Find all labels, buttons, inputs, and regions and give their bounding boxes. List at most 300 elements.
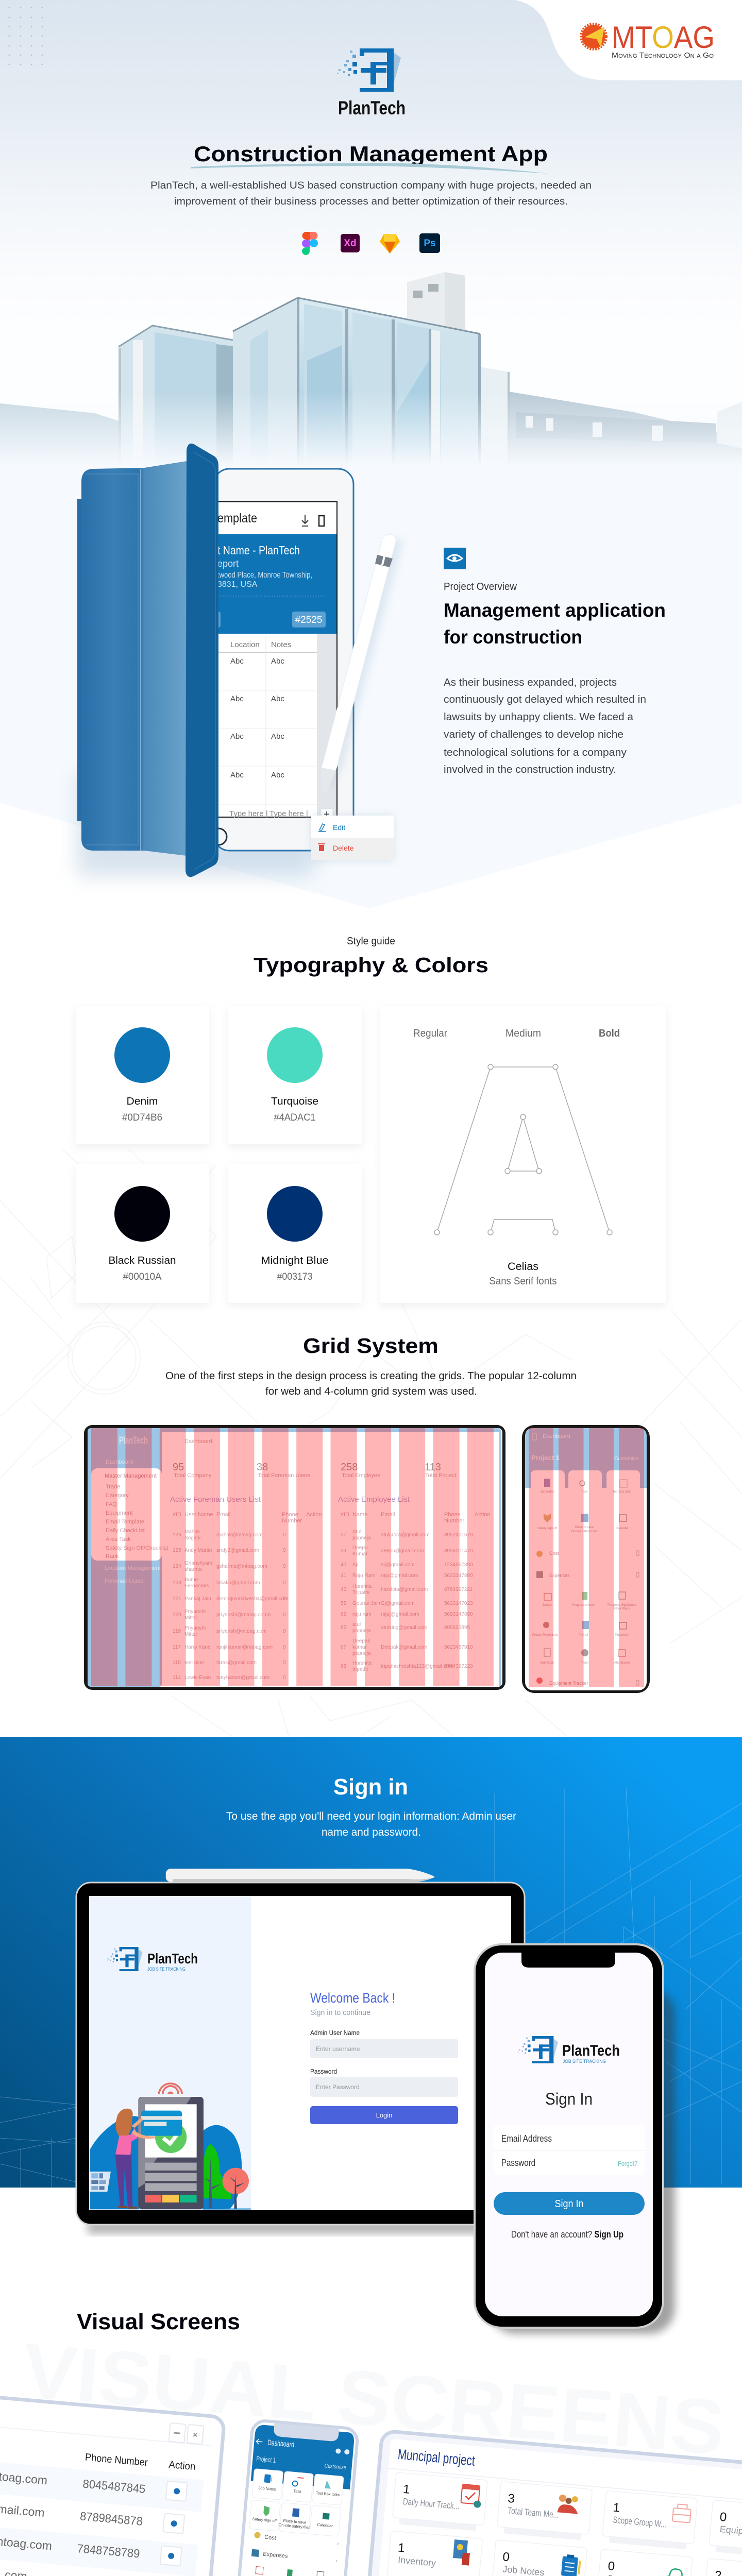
phone mockup xyxy=(475,1944,675,2334)
faint ui text: Number xyxy=(444,1518,464,1524)
faint ui text: Harry Kane xyxy=(184,1645,211,1650)
faint ui text: tarak@gmail.com xyxy=(216,1660,257,1666)
ipad screen: + xyxy=(324,809,330,820)
faint ui text: Action xyxy=(306,1512,322,1518)
faint ui text: 119 xyxy=(173,1629,181,1634)
intro paragraph: PlanTech, a well-established US based construction company with huge projects, needed an xyxy=(150,180,592,191)
faint ui text: atul xyxy=(352,1622,361,1628)
credentials card: Email Address xyxy=(501,2133,552,2144)
swatch: denim: Denim xyxy=(127,1096,158,1107)
cost and expenses rows: Cost xyxy=(264,2534,276,2541)
faint ui text: Category xyxy=(106,1493,129,1499)
faint ui text: #ID xyxy=(341,1512,349,1518)
overview heading: Management application xyxy=(444,600,666,621)
faint ui text xyxy=(531,1433,639,1686)
stat values: 0 xyxy=(719,2510,727,2524)
faint ui text: On-site safety Files xyxy=(571,1530,598,1533)
ipad screen: 3831, USA xyxy=(217,580,258,589)
swatch: turquoise: Turquoise xyxy=(271,1096,318,1107)
faint ui text: 114 xyxy=(173,1675,181,1681)
font weights: Regular xyxy=(413,1028,447,1039)
phone header text: Dashboard xyxy=(267,2438,295,2449)
typography card xyxy=(380,1006,666,1303)
overview paragraph: continuously got delayed which resulted in xyxy=(444,694,646,705)
PlanTech logo xyxy=(337,48,406,118)
table rows xyxy=(0,2469,146,2576)
faint ui text: Sogani xyxy=(184,1535,200,1541)
faint ui text: Total Project xyxy=(425,1472,457,1479)
ipad screen: Type here | xyxy=(269,809,308,818)
font name: Sans Serif fonts xyxy=(490,1276,556,1287)
ipad cover xyxy=(77,444,218,877)
table headers xyxy=(85,2452,196,2472)
faint ui text: Number xyxy=(282,1518,302,1524)
faint ui text: demoquvakrives94@gmail.com xyxy=(216,1596,289,1602)
faint ui text: Daily CheckList xyxy=(106,1528,145,1534)
faint ui text: papneja xyxy=(352,1628,371,1634)
faint ui text: 5693147890 xyxy=(444,1612,473,1617)
faint ui text: Phone xyxy=(282,1512,298,1518)
MTOAG logo: MTOAG xyxy=(612,20,715,55)
faint ui text: Location Management xyxy=(105,1565,161,1571)
desktop grid mockup xyxy=(84,1425,505,1690)
faint ui text: 95 xyxy=(173,1462,184,1473)
faint ui text: Project Projections xyxy=(532,1634,558,1637)
faint ui text: 65 xyxy=(341,1625,347,1631)
faint ui text: Mittal xyxy=(184,1632,197,1637)
faint ui text: 41 xyxy=(341,1573,347,1579)
ipad screen: Abc xyxy=(271,771,284,779)
style guide heading xyxy=(254,936,488,977)
faint ui text: Bumo xyxy=(184,1577,198,1583)
icon: sketch xyxy=(380,234,400,253)
blueprint background xyxy=(0,1149,742,1736)
faint ui text: andy2@gmail.com xyxy=(216,1548,259,1553)
swatch: black russian: #00010A xyxy=(123,1272,162,1282)
notch xyxy=(521,1952,615,1968)
faint ui text: Email xyxy=(381,1512,395,1518)
faint ui text: FAQ xyxy=(106,1501,117,1507)
project overview xyxy=(444,548,666,775)
panel: foreman phone table: × xyxy=(192,2431,198,2440)
faint ui text: 62 xyxy=(341,1612,347,1617)
ipad body xyxy=(214,469,353,851)
laptop screen xyxy=(89,1896,511,2210)
panel: foreman phone table xyxy=(0,2381,225,2576)
faint ui text: tonyhamer@gmail.com xyxy=(216,1675,269,1681)
table headers: Action xyxy=(168,2459,196,2472)
phone screen xyxy=(485,1953,653,2316)
icon: photoshop: Ps xyxy=(424,238,436,249)
swatch: turquoise xyxy=(228,1006,362,1144)
faint ui text: Atul xyxy=(352,1529,361,1535)
font weights xyxy=(413,1028,620,1039)
login form: Password xyxy=(310,2067,337,2075)
faint ui text: Master Management xyxy=(105,1473,157,1479)
faint ui text: Harshita xyxy=(352,1584,372,1589)
ipad shadow xyxy=(77,773,314,876)
overview paragraph xyxy=(444,677,646,775)
intro paragraph: improvement of their business processes and better optimization of their resources. xyxy=(174,196,568,207)
sign in title: Sign In xyxy=(545,2090,593,2108)
feature labels: Job Notes xyxy=(258,2485,276,2492)
window buttons xyxy=(169,2423,204,2444)
credentials card xyxy=(494,2125,645,2175)
plantech logo xyxy=(107,1947,198,1972)
icon: adobe xd xyxy=(341,234,360,252)
letter A outline xyxy=(434,1064,612,1235)
building photo xyxy=(0,272,742,472)
edit delete menu xyxy=(311,816,394,860)
faint ui text: ranjitkumar@mtoag.com xyxy=(216,1645,273,1650)
icon: eye xyxy=(444,548,466,569)
faint ui text: Active Employee List xyxy=(338,1495,410,1504)
faint ui text: Deepu xyxy=(352,1545,367,1551)
faint ui text: User Name xyxy=(184,1512,213,1518)
phone frame xyxy=(475,1944,663,2328)
faint ui text: Daily's xyxy=(543,1604,552,1607)
faint ui text: Trade xyxy=(106,1484,120,1490)
icon: daily hours calendar xyxy=(461,2484,482,2508)
phone shadow xyxy=(490,1989,675,2334)
icon: figma xyxy=(302,232,318,255)
sign in section xyxy=(0,1737,742,2188)
faint ui text: Progress sheets xyxy=(572,1604,595,1607)
ipad screen: #2525 xyxy=(295,615,322,625)
faint ui text: 40 xyxy=(341,1562,347,1568)
faint ui text: 0 xyxy=(283,1548,286,1553)
faint ui text: 5623147023 xyxy=(444,1601,473,1606)
wireframe building xyxy=(0,1788,742,2188)
faint ui text: Mittal xyxy=(184,1615,197,1621)
MTOAG logo xyxy=(581,20,715,60)
faint ui text: papneja xyxy=(352,1651,371,1656)
swatch: midnight blue: Midnight Blue xyxy=(261,1255,329,1266)
stat values: 0 xyxy=(608,2559,615,2573)
faint ui text: 5623487910 xyxy=(444,1645,473,1650)
visual screens heading: Visual Screens xyxy=(77,2309,240,2334)
sidebar base xyxy=(88,1428,501,1687)
stylus pen xyxy=(166,1869,434,1883)
faint ui text: 258 xyxy=(341,1462,358,1473)
table rows: 8789845878 xyxy=(79,2509,143,2528)
phone header text xyxy=(255,2437,348,2471)
phone logo xyxy=(518,2036,620,2064)
ipad screen: eport xyxy=(217,558,239,569)
sign in paragraph xyxy=(226,1810,516,1838)
faint ui text: Task xyxy=(581,1490,588,1494)
swatch: black russian xyxy=(76,1164,209,1303)
faint ui text: tripathi xyxy=(352,1667,368,1672)
panel: municipal project xyxy=(362,2431,742,2576)
title xyxy=(191,142,549,174)
faint ui text: Total Foreman Users xyxy=(258,1472,311,1479)
feature labels: Place to save xyxy=(283,2518,307,2525)
faint ui text: 8764397221 xyxy=(444,1587,473,1592)
faint ui text: Ghanshyam xyxy=(184,1561,212,1566)
faint ui text: aji@gmail.com xyxy=(381,1562,415,1568)
faint ui text: Cost xyxy=(549,1551,559,1556)
faint ui text: Total Employee xyxy=(342,1472,380,1479)
login form: Sign in to continue xyxy=(310,2008,370,2017)
faint ui text: tripathishreshta123@gmail.com xyxy=(381,1664,453,1669)
overview paragraph: As their business expanded, projects xyxy=(444,677,617,688)
login illustration xyxy=(90,2083,251,2210)
faint ui text: deepu@gmail.com xyxy=(381,1548,424,1554)
overview paragraph: variety of challenges to develop niche xyxy=(444,729,623,740)
ipad screen xyxy=(206,502,337,845)
faint ui text: 0 xyxy=(283,1612,286,1618)
stat labels: Total Team Me... xyxy=(508,2505,560,2520)
faint ui text: Equipment Tracker xyxy=(549,1681,588,1686)
faint ui text: Rank xyxy=(106,1553,119,1560)
row stripes xyxy=(0,2446,204,2576)
faint ui text: 0 xyxy=(283,1629,286,1634)
phone logo: JOB SITE TRACKING xyxy=(563,2059,606,2064)
credentials card: Password xyxy=(501,2158,535,2168)
faint ui text: Email xyxy=(216,1512,231,1518)
style guide heading: Typography & Colors xyxy=(254,953,488,977)
icon: briefcase xyxy=(672,2504,692,2523)
faint ui text: sharma xyxy=(184,1567,202,1572)
PlanTech logo: PlanTech xyxy=(338,97,406,118)
feature labels: Task xyxy=(293,2488,302,2494)
grid system heading: for web and 4-column grid system was used. xyxy=(265,1386,477,1397)
faint ui text: priyanshi@mtoag.co.no xyxy=(216,1612,271,1618)
grid system heading: Grid System xyxy=(303,1334,439,1358)
faint ui text: Progress Highlighted xyxy=(608,1604,636,1607)
ipad screen: Abc xyxy=(230,771,244,779)
card shadows xyxy=(76,1009,666,1306)
ipad screen: Notes xyxy=(271,640,291,649)
faint ui text: Priyanshi xyxy=(184,1609,206,1615)
login form: Enter Password xyxy=(316,2083,360,2091)
faint ui text: Dashboard xyxy=(543,1433,570,1439)
faint ui text: Team xyxy=(581,1662,588,1665)
watermark: VISUAL SCREENS xyxy=(20,2327,728,2471)
faint ui text: Deepak xyxy=(352,1638,370,1644)
swatch: black russian: Black Russian xyxy=(108,1255,176,1266)
faint ui text: 67 xyxy=(341,1645,347,1650)
stat values: 1 xyxy=(397,2541,406,2555)
ipad screen: twood Place, Monroe Township, xyxy=(217,571,312,580)
decorative dot grid xyxy=(9,7,43,65)
ipad screen: Abc xyxy=(230,732,244,741)
sign in paragraph: name and password. xyxy=(322,1826,421,1838)
sign in heading: Sign in xyxy=(333,1774,408,1800)
faint ui text xyxy=(105,1435,491,1681)
phone header text: Project 1 xyxy=(256,2454,276,2464)
edit delete menu: Delete xyxy=(333,844,354,852)
phone logo: PlanTech xyxy=(562,2042,620,2059)
faint ui text: Pankaj Jain xyxy=(184,1596,211,1602)
faint ui text: mahak@mtoag.com xyxy=(216,1532,263,1538)
stat labels xyxy=(392,2496,742,2576)
stat card shadows xyxy=(389,2515,742,2576)
ipad mockup xyxy=(77,444,404,877)
faint ui text: Email Template xyxy=(106,1519,144,1525)
faint ui text: 0 xyxy=(283,1532,286,1538)
faint ui text: Customize xyxy=(614,1456,639,1462)
faint ui text: 27 xyxy=(341,1532,347,1538)
faint ui text: 0 xyxy=(283,1564,286,1569)
faint ui text: 8764397220 xyxy=(444,1664,473,1669)
cost and expenses rows: › xyxy=(336,2540,340,2547)
project title: Muncipal project xyxy=(397,2446,476,2469)
faint ui text: Andy Martin xyxy=(184,1548,212,1553)
plantech logo: PlanTech xyxy=(147,1951,198,1967)
faint ui text: Calendar xyxy=(616,1527,628,1530)
faint ui text: 0 xyxy=(283,1580,286,1586)
faint ui text: Payroll xyxy=(579,1634,588,1637)
faint ui text: 895623895 xyxy=(444,1625,470,1631)
overview label: Project Overview xyxy=(444,581,517,592)
laptop shadow xyxy=(88,2221,500,2234)
faint ui text: 113 xyxy=(425,1462,441,1473)
stat values xyxy=(392,2482,727,2576)
sign in button xyxy=(494,2192,645,2215)
sign up link: Don't have an account? Sign Up xyxy=(511,2229,623,2240)
faint ui text: 0 xyxy=(283,1596,286,1602)
faint ui text: priyansh@mtoag.com xyxy=(216,1629,266,1634)
ipad screen: Abc xyxy=(271,732,284,741)
tool icons xyxy=(302,232,440,255)
faint ui text: Total Company xyxy=(174,1472,212,1479)
faint ui text: Dashboard xyxy=(184,1438,212,1445)
login form: Admin User Name xyxy=(310,2029,360,2037)
faint ui text: 68 xyxy=(341,1664,347,1669)
apple pencil xyxy=(322,534,404,792)
ipad screen: Abc xyxy=(230,657,244,666)
credentials card: Forgot? xyxy=(618,2159,637,2167)
faint ui text: 8956201470 xyxy=(444,1548,473,1554)
faint ui text: 8952301679 xyxy=(444,1532,473,1538)
font name: Celias xyxy=(508,1261,538,1273)
faint ui text: rajuj@gmail.com xyxy=(381,1612,419,1617)
faint ui text: gsharma@mtoag.com xyxy=(216,1564,267,1569)
faint ui text: Floor Plans xyxy=(614,1607,630,1611)
overview paragraph: technological solutions for a company xyxy=(444,747,627,758)
faint ui text: kumar xyxy=(352,1645,367,1650)
faint ui text: test user xyxy=(184,1660,205,1666)
faint ui text: 121 xyxy=(173,1596,181,1602)
faint ui text: PlanTech xyxy=(119,1435,148,1446)
ipad screen: Abc xyxy=(271,694,284,703)
feature card icons xyxy=(261,2474,332,2522)
icon: job notes xyxy=(561,2554,581,2576)
cost and expenses rows: Expenses xyxy=(263,2551,288,2560)
faint ui text: 5623147890 xyxy=(444,1573,473,1579)
faint ui text: Phone xyxy=(444,1512,461,1518)
MTOAG logo: Moving Technology On a Go xyxy=(612,51,714,60)
icon: cloud upload xyxy=(664,2568,686,2576)
action buttons xyxy=(155,2481,188,2576)
utility icons xyxy=(251,2566,325,2576)
faint ui text: Aji xyxy=(352,1562,358,1568)
icon: photoshop xyxy=(419,233,440,253)
faint ui text: atulsing@gmail.com xyxy=(381,1625,427,1631)
feature labels: On-site safety files xyxy=(278,2522,311,2530)
stat labels: Daily Hour Track... xyxy=(402,2496,460,2512)
faint ui text: Raju Ram xyxy=(352,1573,375,1579)
ipad screen: Location xyxy=(230,640,260,649)
sign in paragraph: To use the app you'll need your login information: Admin user xyxy=(226,1810,516,1822)
faint ui text: Fernandes xyxy=(184,1583,209,1589)
table rows: 8045487845 xyxy=(82,2477,146,2496)
cost and expenses rows: › xyxy=(335,2558,338,2564)
ipad screen: Type here | xyxy=(229,809,268,818)
faint ui text: papneja xyxy=(352,1535,371,1541)
faint ui text: 0 xyxy=(283,1660,286,1666)
stat values: 0 xyxy=(502,2550,510,2564)
ipad screen: emplate xyxy=(217,511,257,526)
faint ui text: Gourav Jain xyxy=(352,1601,380,1606)
faint ui text: 120 xyxy=(173,1612,181,1618)
plantech logo: JOB SITE TRACKING xyxy=(147,1967,185,1972)
sign in button: Sign In xyxy=(554,2198,583,2210)
faint ui text: Foreman Users xyxy=(105,1578,144,1584)
faint ui text: Submittals xyxy=(540,1662,554,1665)
faint ui text: Place to save xyxy=(575,1526,594,1529)
phone header text: Customize xyxy=(324,2463,346,2471)
ipad screen: Abc xyxy=(271,657,284,666)
font weights: Bold xyxy=(599,1028,620,1039)
faint ui text: Job Notes xyxy=(540,1490,554,1494)
feature labels: Calendar xyxy=(317,2522,333,2528)
laptop mockup xyxy=(76,1883,525,2234)
font name xyxy=(490,1261,556,1287)
faint ui text: 124 xyxy=(173,1564,181,1569)
feature labels: Tool Box talks xyxy=(316,2490,340,2497)
table headers: Phone Number xyxy=(85,2452,148,2468)
column overlay xyxy=(91,1428,494,1686)
header icons xyxy=(335,2448,350,2455)
faint ui text: 38 xyxy=(257,1462,268,1473)
faint ui text: 125 xyxy=(173,1548,181,1553)
header cards xyxy=(531,1470,640,1491)
faint ui text: raju ram xyxy=(352,1612,372,1617)
swatch: denim xyxy=(76,1006,209,1144)
faint ui text: Tool box talks xyxy=(613,1490,631,1494)
overview heading xyxy=(444,600,666,648)
faint ui text: Safety sign off xyxy=(537,1527,557,1530)
faint ui text: 115 xyxy=(173,1660,181,1666)
faint ui text: 0 xyxy=(283,1645,286,1650)
utility labels xyxy=(240,2575,337,2576)
faint ui text: 1234567890 xyxy=(444,1562,473,1568)
faint ui text: 55 xyxy=(341,1601,347,1606)
style guide heading: Style guide xyxy=(347,936,395,947)
icon: adobe xd: Xd xyxy=(344,238,357,249)
grid system heading: One of the first steps in the design process is creating the grids. The popular 12-column xyxy=(165,1370,577,1382)
login form: Login xyxy=(376,2111,392,2119)
login form: Welcome Back ! xyxy=(310,1990,395,2006)
column overlay xyxy=(529,1428,644,1687)
table rows: 7848758789 xyxy=(77,2541,140,2561)
faint ui text: Equipment xyxy=(106,1510,133,1516)
faint ui text: raju@gmail.com xyxy=(381,1573,418,1579)
stat values: 3 xyxy=(507,2492,515,2506)
faint ui text: lukaku@gmail.com xyxy=(216,1580,260,1586)
faint ui text: 39 xyxy=(341,1548,347,1554)
grid system heading xyxy=(165,1334,577,1397)
faint ui text: Priyanshi xyxy=(184,1625,206,1631)
icon: team xyxy=(558,2494,579,2514)
stat values: 1 xyxy=(402,2482,411,2497)
faint ui text: Name xyxy=(352,1512,367,1518)
feature labels xyxy=(252,2485,340,2532)
faint ui text: 117 xyxy=(173,1645,181,1650)
